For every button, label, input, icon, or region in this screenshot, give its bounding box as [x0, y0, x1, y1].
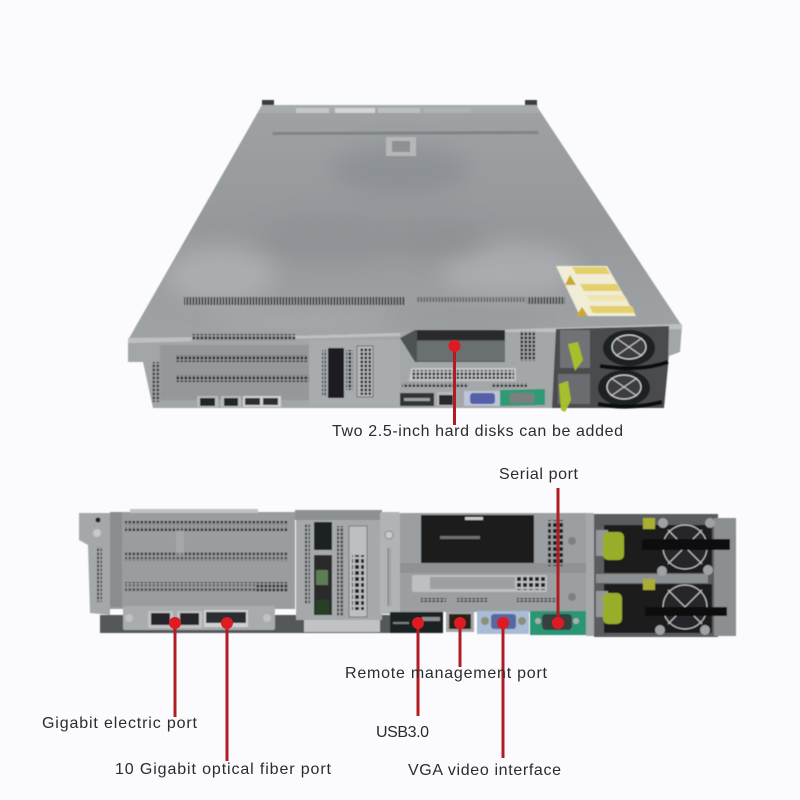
left bracket: [79, 513, 110, 615]
label: VGA video interface: VGA video interface: [408, 762, 561, 779]
callout line: VGA video interface: [497, 617, 509, 758]
label: 10 gigabit optical fiber port: 10 Gigabit optical fiber port: [115, 761, 332, 778]
middle riser panel: [295, 510, 382, 632]
callout line: hard disks: [448, 340, 460, 425]
warning label: [556, 266, 636, 316]
power supply modules: [552, 326, 669, 412]
rear ports: [390, 611, 588, 635]
label: gigabit electric port: Gigabit electric port: [42, 715, 198, 732]
callout line: gigabit electric port: [169, 617, 181, 717]
chassis base strip: [100, 615, 410, 633]
expansion card cage: [110, 509, 295, 609]
rear ports: [197, 389, 545, 407]
rear panel: [128, 324, 682, 408]
label: hard disks: Two 2.5-inch hard disks can be added: [332, 423, 623, 440]
callout line: serial port: [552, 488, 564, 629]
label: serial port: Serial port: [499, 466, 579, 483]
callout line: 10 gigabit optical fiber port: [221, 617, 233, 761]
power supply modules: [586, 513, 736, 637]
label: remote management port: Remote management port: [345, 665, 548, 682]
server: rear elevation: [79, 509, 736, 637]
network port plate: [123, 606, 275, 630]
drive bay section: [400, 513, 586, 612]
server lid: [128, 100, 682, 340]
server: angled top view: [128, 100, 682, 412]
callout line: USB3.0: [412, 617, 424, 716]
callout line: remote management port: [454, 617, 466, 667]
label: USB3.0: USB3.0: [376, 724, 429, 741]
right bracket: [380, 512, 400, 614]
